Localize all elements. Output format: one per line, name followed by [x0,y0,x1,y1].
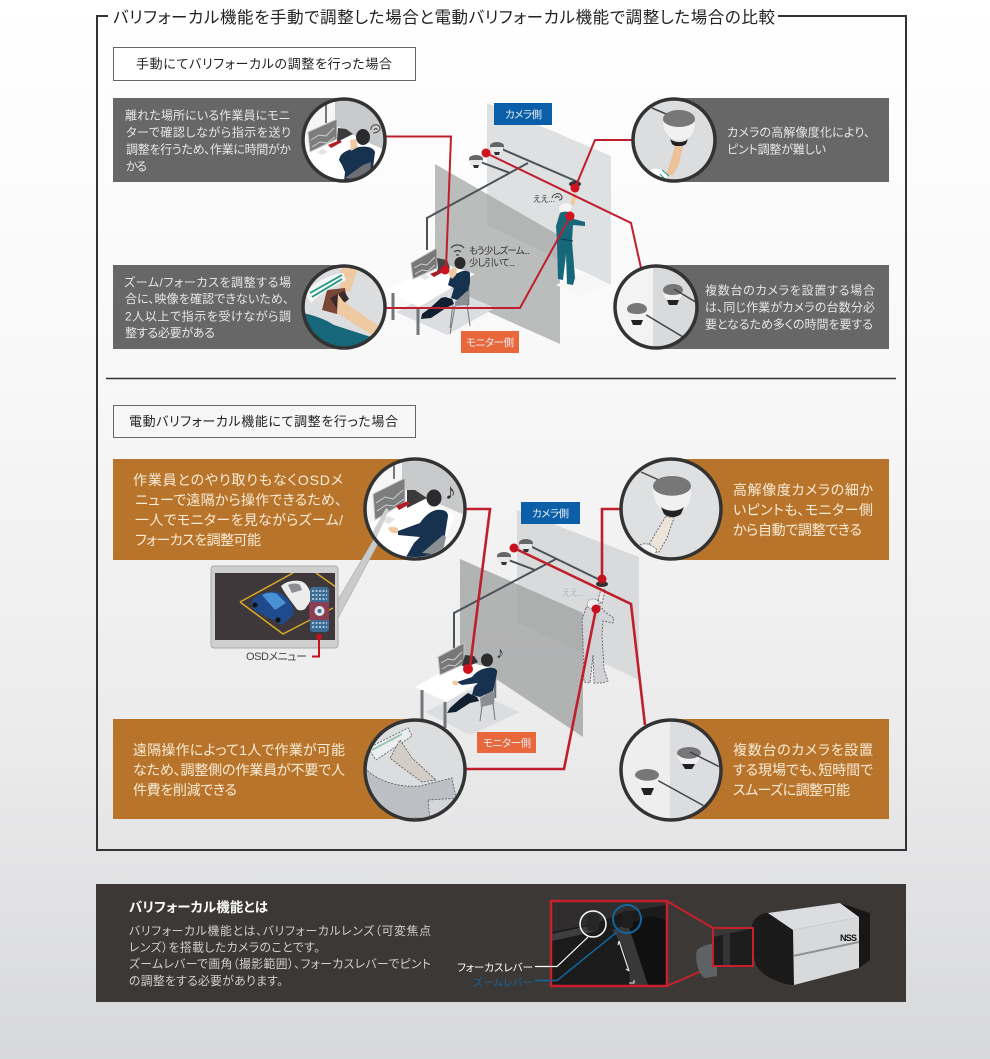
comparison frame [97,16,906,850]
panel: labor savings [113,719,415,819]
lever labels [457,932,617,989]
heading: manual adjustment [114,48,416,80]
panel: automatic focus: いピントも、モニター側 [733,502,873,518]
circle: ghost worker not needed [365,720,465,820]
panel: labor savings: 件費を削減できる [133,782,237,798]
OSD label [246,634,322,663]
speech: operator instruction: もう少しズーム... [469,245,530,256]
panel: hard to focus: ピント調整が難しい [727,142,826,156]
panel: remote instruction [113,98,344,182]
panel: multiple cameras: 要となるため多くの時間を要する [705,318,873,332]
label: camera side [494,103,552,125]
text block: explanation: レンズ）を搭載したカメラのことです。 [129,940,320,954]
panel: remote instruction: ターで確認しながら指示を送り [126,124,291,140]
heading: what is varifocal: バリフォーカル機能とは [129,899,268,915]
panel: two workers needed [113,265,344,349]
text block: explanation: ズームレバーで画角（撮影範囲）、フォーカスレバーでピント [129,957,431,971]
panel: hard to focus: カメラの高解像度化により、 [727,126,870,140]
label: camera side: カメラ側 [532,507,569,520]
circle: hand adjusting camera [633,99,715,184]
text block: explanation: の調整をする必要があります。 [129,974,283,988]
text block: explanation: バリフォーカル機能とは、バリフォーカルレンズ（可変焦点 [129,924,431,938]
OSD label: OSDメニュー [246,651,307,663]
panel: multi-camera sites: する現場でも、短時間で [733,762,873,778]
heading: motorized adjustment: 電動バリフォーカル機能にて調整を行った場合 [129,414,398,429]
panel: automatic focus [671,459,889,560]
panel: one person operation: 作業員とのやり取りもなくOSDメ [133,472,343,488]
circle: worker on phone [303,264,385,350]
ghost worker dashed: ええ... [562,588,584,598]
panel: one person operation: 一人でモニターを見ながらズーム/ [135,512,343,528]
speech: operator instruction [451,245,530,268]
brand mark: NSS [840,933,857,943]
ghost worker dashed [562,588,614,683]
panel: multi-camera sites [671,719,889,819]
icon: dome cameras [497,539,608,587]
desk and monitor [387,248,475,335]
lever labels: フォーカスレバー [457,962,533,974]
panel: multi-camera sites: スムーズに調整可能 [733,782,850,798]
seated operator [447,654,497,721]
panel: multi-camera sites: 複数台のカメラを設置 [733,742,873,758]
label: monitor side [477,732,536,753]
panel: multiple cameras [656,265,889,349]
panel: remote instruction: 離れた場所にいる作業員にモニ [125,108,290,122]
circle: two cameras on wall [615,266,699,348]
circle: camera close-up [621,459,721,559]
panel: remote instruction: かる [126,160,147,174]
section: manual scene illustration [387,103,611,344]
circle: relaxed operator [365,459,465,559]
panel: one person operation: フォーカスを調整可能 [135,532,261,548]
label: monitor side [461,331,519,353]
panel: two workers needed: 2人以上で指示を受けながら調 [125,308,291,324]
text block: explanation [129,924,431,988]
panel: what is varifocal [96,884,906,1002]
panel: two workers needed: ズーム/フォーカスを調整する場 [124,274,291,290]
desk and monitor [415,643,497,728]
remote control [309,587,329,632]
camera body photo [696,903,870,985]
panel: remote instruction: 調整を行うため、作業に時間がか [126,142,291,156]
panel: two workers needed: 合に、映像を確認できないため、 [125,291,289,306]
speech: worker reply: ええ... [533,194,555,204]
callout lines: manual [386,136,641,308]
panel: hard to focus [674,98,889,182]
divider [106,378,896,380]
icon: dome cameras [469,142,581,187]
panel: automatic focus: から自動で調整できる [733,522,862,538]
section: motorized scene illustration [415,510,639,737]
label: monitor side: モニター側 [483,736,531,750]
circle: operator at monitor [303,99,385,182]
panel: automatic focus: 高解像度カメラの細か [733,482,873,498]
OSD menu thumbnail [210,540,378,648]
circle: two cameras on wall [621,720,722,820]
panel: labor savings: なため、調整側の作業員が不要で人 [133,762,345,778]
zoomed lens photo [551,901,713,986]
seated operator [421,257,470,334]
speech: operator instruction: 少し引いて... [469,257,515,268]
panel: two workers needed: 整する必要がある [125,325,215,340]
label: camera side [521,502,580,524]
icon: music note: ♪ [496,645,504,662]
title: バリフォーカル機能を手動で調整した場合と電動バリフォーカル機能で調整した場合の比較 [113,8,776,27]
label: camera side: カメラ側 [505,108,542,121]
panel: one person operation: ニューで遠隔から操作できるため、 [135,492,342,508]
worker adjusting camera [556,193,585,285]
heading: motorized adjustment [114,406,416,438]
label: monitor side: モニター側 [466,336,514,349]
panel: multiple cameras: は、同じ作業がカメラの台数分必 [705,300,875,314]
callout lines: motorized [462,509,645,769]
heading: manual adjustment: 手動にてバリフォーカルの調整を行った場合 [136,56,392,72]
icon: worker wifi [552,194,562,200]
lever labels: ズームレバー [473,976,533,989]
panel: labor savings: 遠隔操作によって1人で作業が可能 [133,742,345,758]
panel: multiple cameras: 複数台のカメラを設置する場合 [705,282,875,298]
circle: relaxed operator: ♪ [445,479,456,504]
panel: one person operation [113,459,415,560]
